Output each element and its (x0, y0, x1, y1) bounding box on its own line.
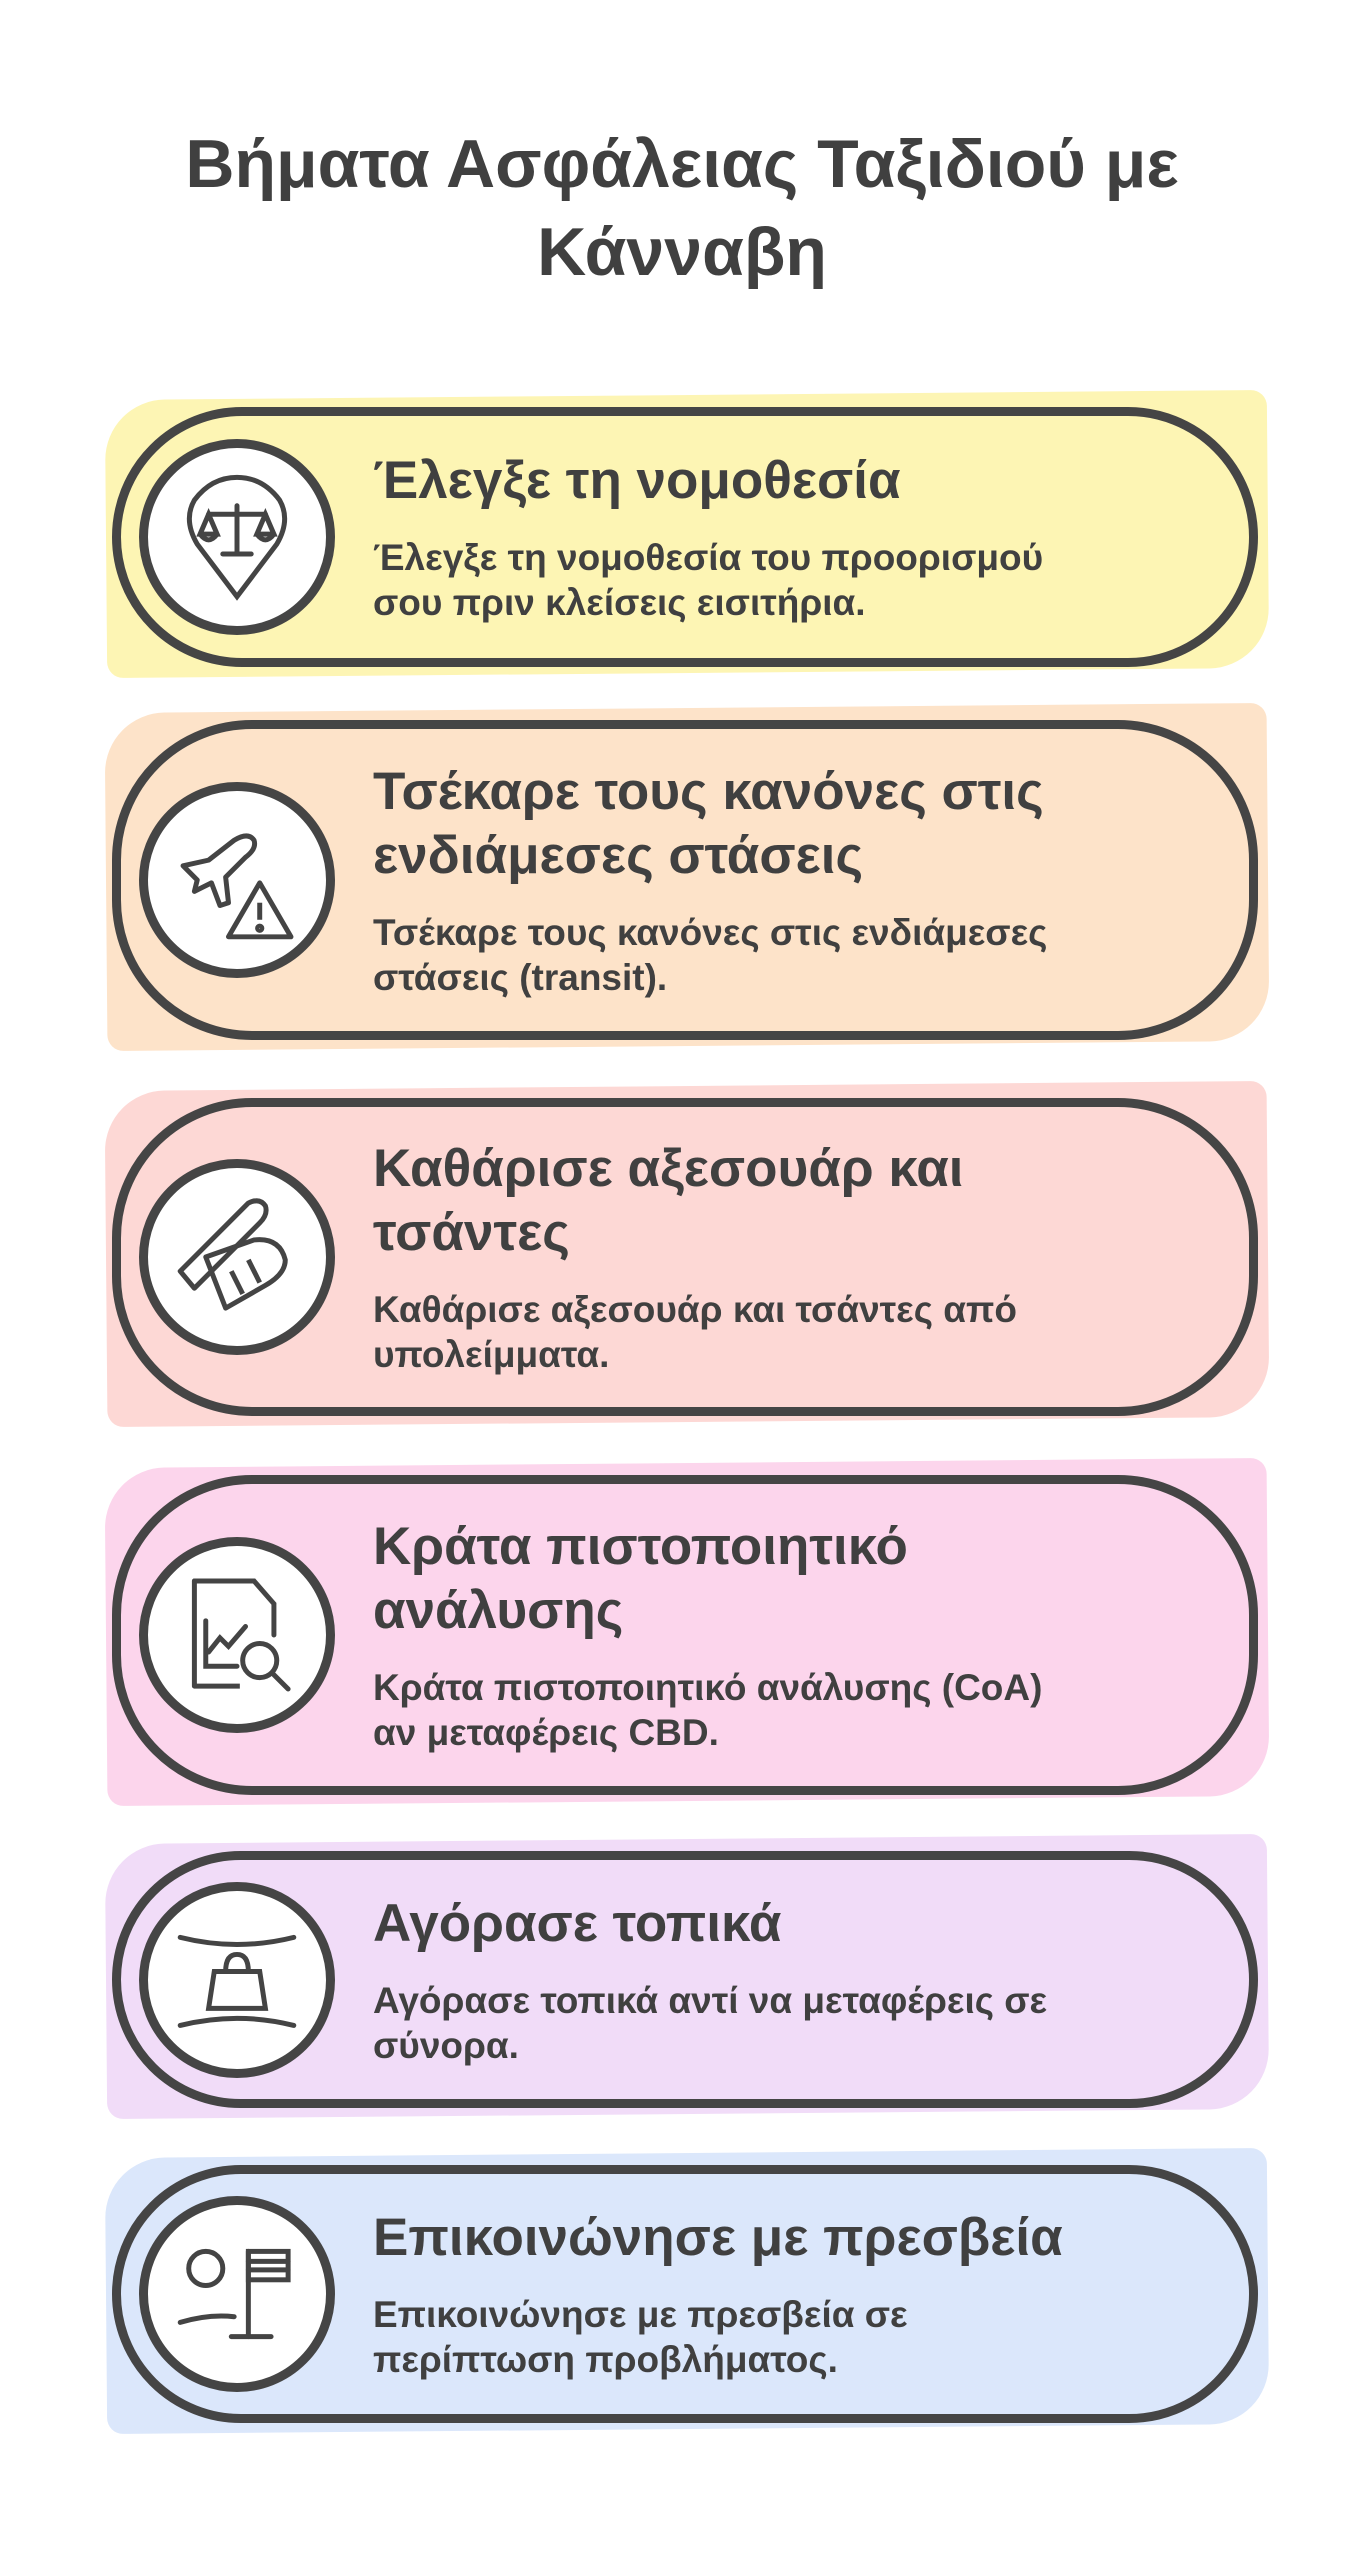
panel: buy locally (105, 1834, 1269, 2119)
icon: document magnifier (139, 1537, 335, 1733)
panel: clean accessories (105, 1081, 1269, 1427)
panel: contact embassy: Επικοινώνησε με πρεσβεία (373, 2208, 1063, 2267)
panel: contact embassy: περίπτωση προβλήματος. (373, 2339, 838, 2380)
panel: buy locally: Αγόρασε τοπικά (373, 1894, 781, 1952)
panel: transit rules: Τσέκαρε τους κανόνες στις (373, 762, 1044, 821)
panel: buy locally: σύνορα. (373, 2024, 519, 2066)
panel: certificate of analysis: Κράτα πιστοποιητικό ανάλυσης (CoA) (373, 1667, 1042, 1708)
panel: clean accessories: υπολείμματα. (373, 1334, 609, 1375)
panel: contact embassy (105, 2148, 1269, 2434)
icon: globe and flag (139, 2196, 335, 2392)
panel: clean accessories: τσάντες (373, 1203, 570, 1262)
panel: contact embassy: Επικοινώνησε με πρεσβεία σε (373, 2294, 908, 2335)
icon: brush (139, 1159, 335, 1355)
title: Βήματα Ασφάλειας Ταξιδιού με (185, 126, 1179, 202)
panel: certificate of analysis: αν μεταφέρεις CBD. (373, 1712, 719, 1753)
panel: certificate of analysis (105, 1458, 1269, 1806)
panel: check legislation: Έλεγξε τη νομοθεσία (373, 451, 901, 510)
panel: check legislation: σου πριν κλείσεις εισιτήρια. (373, 582, 866, 623)
icon: shopping bag (139, 1882, 335, 2078)
panel: check legislation: Έλεγξε τη νομοθεσία του προορισμού (373, 537, 1043, 578)
title: Κάνναβη (537, 214, 827, 290)
panel: transit rules: ενδιάμεσες στάσεις (373, 826, 863, 885)
icon: plane warning (139, 782, 335, 978)
panel: transit rules: στάσεις (transit). (373, 957, 667, 998)
panel: transit rules (105, 703, 1269, 1051)
panel: transit rules: Τσέκαρε τους κανόνες στις ενδιάμεσες (373, 912, 1047, 953)
panel: clean accessories: Καθάρισε αξεσουάρ και (373, 1139, 964, 1198)
panel: certificate of analysis: ανάλυσης (373, 1581, 623, 1640)
panel: buy locally: Αγόρασε τοπικά αντί να μεταφέρεις σε (373, 1980, 1047, 2020)
panel: check legislation (105, 390, 1269, 678)
panel: certificate of analysis: Κράτα πιστοποιητικό (373, 1517, 908, 1576)
panel: clean accessories: Καθάρισε αξεσουάρ και τσάντες από (373, 1289, 1017, 1330)
icon: scales pin (139, 439, 335, 635)
title (185, 126, 1179, 290)
